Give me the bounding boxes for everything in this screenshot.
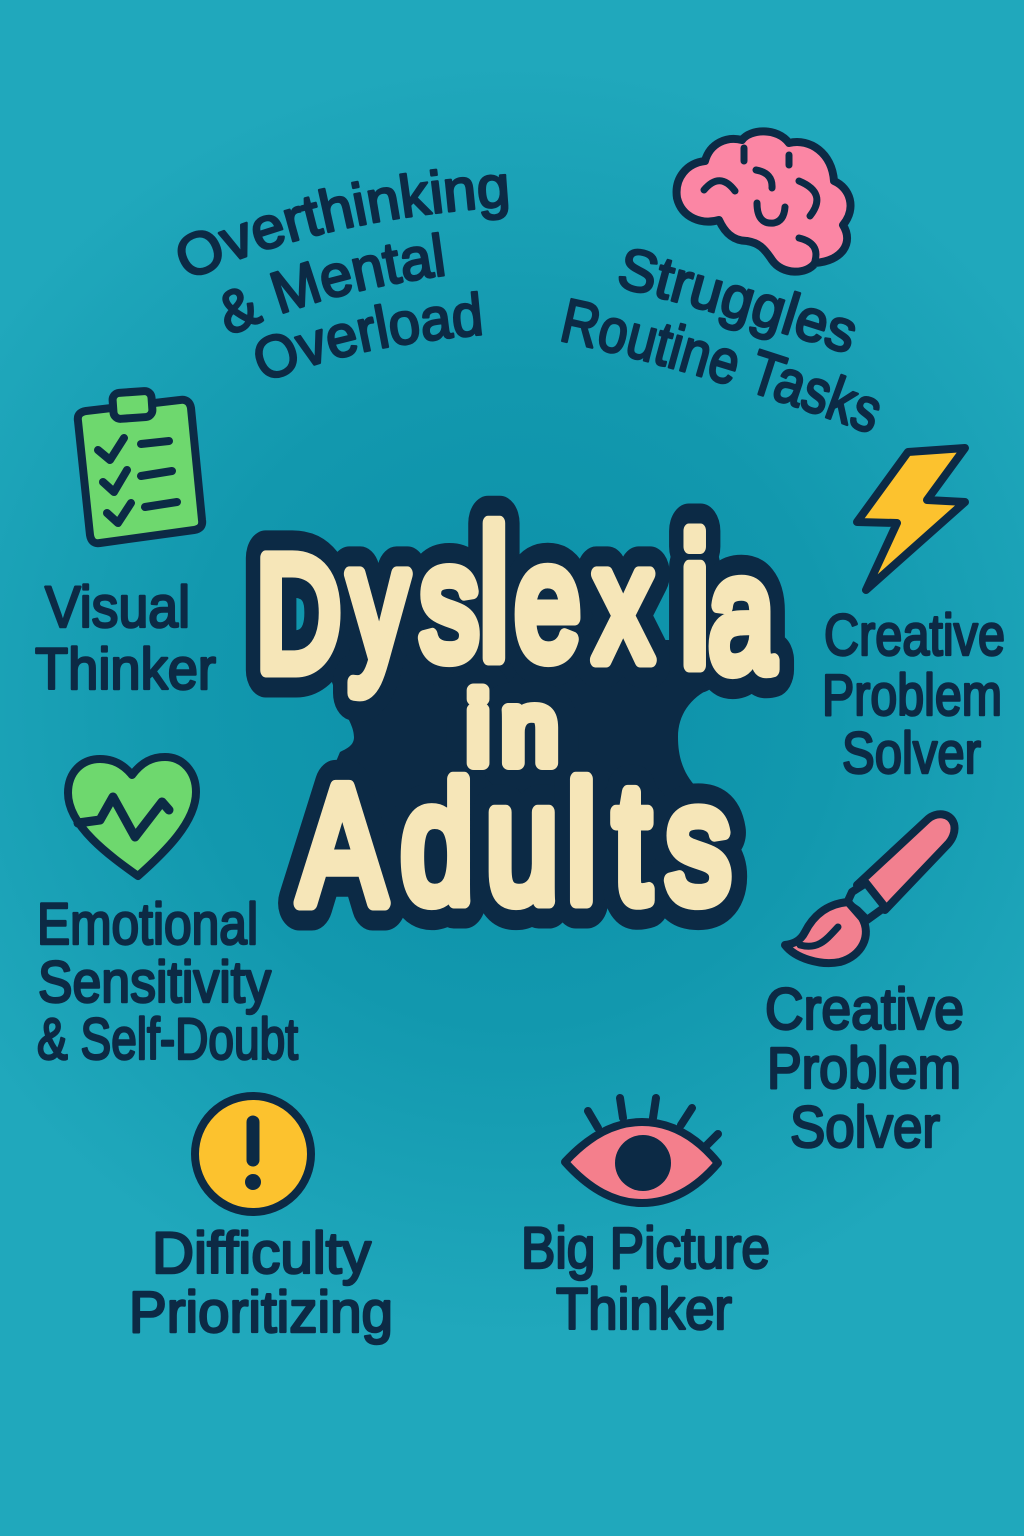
label: Visual Thinker (35, 575, 216, 702)
label: Emotional Sensitivity & Self-Doubt (37, 892, 298, 1072)
title halo: in: in (467, 673, 558, 785)
title fill: Adults: Adults (299, 749, 731, 939)
label: Creative Problem Solver (top): Solver (842, 721, 981, 786)
label: Creative Problem Solver (bottom): Solver (790, 1095, 940, 1160)
icon: eye (565, 1098, 718, 1203)
title (256, 490, 774, 939)
label: Overthinking & Mental Overload: & Mental (222, 232, 445, 334)
label: Struggles Routine Tasks (561, 248, 880, 432)
label: Creative Problem Solver (top) (822, 603, 1005, 786)
label: Struggles Routine Tasks: Routine Tasks (561, 298, 880, 432)
title backing blob (320, 640, 720, 890)
title halo: Adults: Adults (299, 749, 731, 939)
label: Struggles Routine Tasks: Struggles (618, 248, 856, 352)
icon: lightning bolt (857, 448, 965, 590)
icon: checklist clipboard (78, 391, 202, 543)
icon: brain (677, 131, 851, 272)
label: Creative Problem Solver (bottom): Problem (767, 1036, 961, 1101)
label: Difficulty Prioritizing: Prioritizing (129, 1280, 393, 1345)
icon: exclamation circle (195, 1096, 311, 1212)
title fill: in: in (467, 673, 558, 785)
label: Emotional Sensitivity & Self-Doubt: & Self-Doubt (37, 1007, 298, 1072)
label: Emotional Sensitivity & Self-Doubt: Sensitivity (38, 950, 271, 1015)
title halo: Dyslexia: Dyslexia (256, 490, 774, 706)
label: Visual Thinker: Thinker (35, 637, 216, 702)
label: Overthinking & Mental Overload: Overload (255, 290, 482, 378)
label: Difficulty Prioritizing (129, 1221, 393, 1345)
label: Visual Thinker: Visual (45, 575, 190, 640)
title fill: Dyslexia: Dyslexia (256, 490, 774, 706)
label: Big Picture Thinker: Big Picture (521, 1216, 770, 1281)
label: Creative Problem Solver (bottom) (765, 977, 964, 1160)
label: Creative Problem Solver (bottom): Creative (765, 977, 964, 1042)
label: Emotional Sensitivity & Self-Doubt: Emotional (37, 892, 258, 957)
label: Overthinking & Mental Overload: Overthinking (178, 168, 508, 276)
icon: paint brush (785, 814, 955, 963)
label: Big Picture Thinker: Thinker (556, 1277, 732, 1342)
label: Overthinking & Mental Overload (178, 168, 508, 378)
icon: heart with pulse (68, 757, 196, 876)
label: Big Picture Thinker (521, 1216, 770, 1342)
label: Difficulty Prioritizing: Difficulty (152, 1221, 371, 1286)
